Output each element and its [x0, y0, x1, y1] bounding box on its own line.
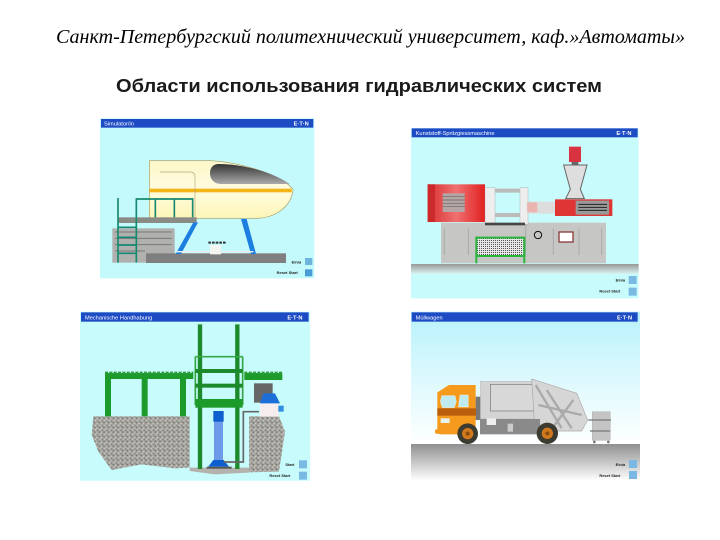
controls: Start: [285, 462, 295, 467]
controls: [599, 460, 637, 479]
floor: [411, 264, 639, 274]
subtitle heading: Области использования гидравлических систем: [116, 75, 602, 96]
panel: garbage truck: [411, 312, 640, 481]
controls: Ein/a: [292, 259, 302, 264]
hydraulic cylinder: [207, 411, 232, 469]
panel: simulator: [100, 118, 314, 278]
controls: Reset Start: [599, 289, 621, 294]
header bar: simulator: [101, 119, 313, 128]
wheels: [457, 423, 558, 444]
waste bin: [588, 412, 611, 443]
simulator cabin: [149, 161, 293, 218]
header bar: mechanical handling: E·T·N: [287, 315, 302, 321]
title: Санкт-Петербургский политехнический университет, каф.»Автоматы»: [56, 27, 685, 48]
hydraulic legs: [146, 219, 286, 263]
header bar: mechanical handling: [81, 312, 309, 322]
panel: injection moulding machine: [411, 128, 639, 298]
header bar: injection moulding: [412, 128, 638, 137]
injection unit and hopper: [527, 147, 612, 216]
hydraulic pipe: [224, 412, 259, 462]
header bar: mechanical handling: Mechanische Handhabung: [85, 315, 152, 321]
header bar: simulator: Simulator/in: [104, 121, 134, 127]
controls: Ein/a: [616, 462, 626, 467]
header bar: garbage truck: Müllwagen: [416, 315, 443, 321]
controls: Reset Start: [277, 270, 298, 275]
green mesh guard: [476, 238, 525, 263]
lift tower: [195, 324, 243, 469]
platform and railings: [112, 198, 197, 263]
controls: [269, 460, 307, 480]
header bar: garbage truck: [412, 312, 638, 322]
controls: [599, 276, 637, 296]
controls: [277, 258, 312, 276]
controls: Reset Start: [269, 473, 291, 478]
rock foundation: [92, 416, 285, 474]
power unit: [254, 383, 284, 417]
green conveyor and frame: [105, 373, 282, 416]
clamping unit: [428, 184, 528, 225]
header bar: injection moulding: Kunststoff-Spritzgiessmaschine: [416, 131, 494, 137]
controls: Reset Start: [599, 473, 621, 478]
controls: Ein/a: [616, 278, 626, 283]
truck body: [480, 379, 588, 434]
truck cab: [435, 385, 480, 434]
header bar: injection moulding: E·T·N: [616, 131, 631, 137]
panel: mechanical handling: [80, 312, 310, 481]
header bar: garbage truck: E·T·N: [617, 315, 632, 321]
header bar: simulator: E·T·N: [294, 121, 309, 127]
road: [411, 444, 640, 481]
machine base: [441, 223, 606, 263]
